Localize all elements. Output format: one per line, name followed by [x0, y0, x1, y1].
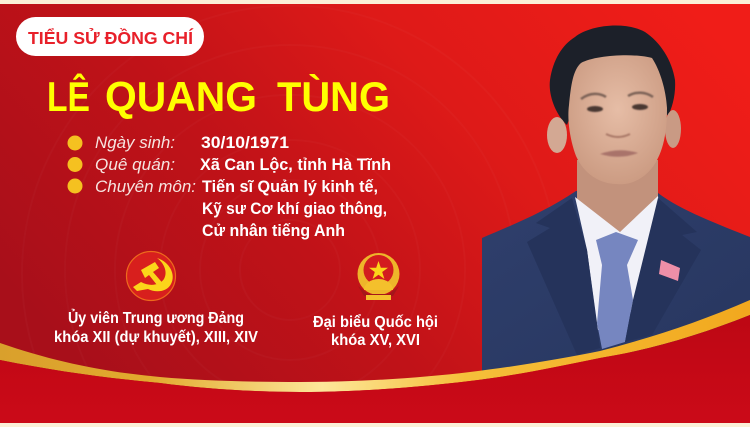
label: expertise: Chuyên môn:	[95, 178, 196, 196]
portrait: left ear	[547, 117, 567, 153]
title: name: QUANG	[105, 73, 257, 120]
portrait: party pin	[659, 260, 680, 281]
text: national assembly role: khóa XV, XVI	[331, 332, 420, 349]
portrait: hair	[550, 26, 675, 125]
gold swoosh band	[0, 300, 750, 392]
icon: party emblem	[126, 252, 176, 300]
background: drum pattern	[22, 6, 558, 420]
heading pill: TIỂU SỬ ĐỒNG CHÍ	[28, 27, 194, 48]
text: national assembly role	[313, 313, 438, 349]
label: hometown: Quê quán:	[95, 156, 175, 174]
text: party role: Ủy viên Trung ương Đảng	[68, 308, 244, 327]
portrait: neck	[577, 160, 658, 232]
portrait: jacket	[482, 191, 750, 380]
text: party role: khóa XII (dự khuyết), XIII, XIV	[54, 329, 258, 346]
portrait: eyebrows, eyes, nose and mouth	[581, 93, 653, 157]
value: expertise line 3: Cử nhân tiếng Anh	[202, 222, 345, 240]
portrait: tie	[596, 232, 638, 349]
bullet: hometown	[68, 157, 82, 172]
text: national assembly role: Đại biểu Quốc hội	[313, 313, 438, 331]
value: expertise line 2: Kỹ sư Cơ khí giao thông,	[202, 200, 387, 218]
portrait: shirt	[575, 196, 662, 330]
text: party role	[54, 308, 258, 346]
title: name: TÙNG	[277, 72, 390, 120]
label: birth date: Ngày sinh:	[95, 134, 175, 152]
portrait: right ear	[665, 110, 681, 148]
bullet: birth date	[68, 136, 82, 150]
portrait: right lapel	[625, 198, 701, 342]
bullet: expertise	[68, 178, 82, 194]
icon: national emblem	[358, 253, 400, 300]
portrait: left lapel	[527, 198, 600, 355]
title: name	[47, 72, 390, 120]
value: birth date: 30/10/1971	[201, 134, 289, 152]
title: name: LÊ	[47, 72, 90, 120]
bio list	[68, 134, 391, 240]
value: hometown: Xã Can Lộc, tỉnh Hà Tĩnh	[200, 156, 391, 174]
portrait: face	[568, 55, 667, 184]
value: expertise line 1: Tiến sĩ Quản lý kinh tế,	[202, 178, 378, 196]
heading pill	[16, 17, 204, 56]
portrait	[482, 26, 750, 380]
bottom red band	[0, 315, 750, 423]
